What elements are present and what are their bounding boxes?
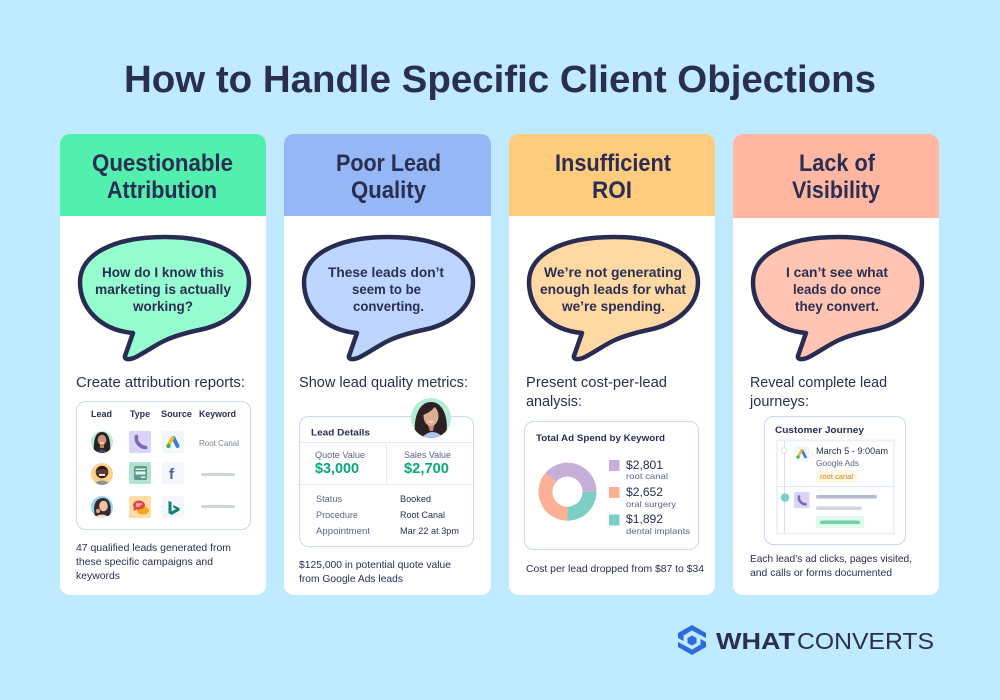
header: insufficient ROI: ROI: [592, 177, 632, 204]
icon: facebook source: f: [169, 466, 175, 483]
chart: total ad spend by keyword: Total Ad Spend by Keyword: [536, 433, 665, 444]
caption: potential quote value: from Google Ads leads: [299, 573, 403, 585]
icon: chat type: [129, 496, 151, 518]
title: How to Handle Specific Client Objections: [124, 59, 876, 101]
subheading: complete lead journeys: Reveal complete lead: [750, 375, 887, 391]
card: customer journey: [764, 416, 906, 544]
card: lead details: $2,700: [404, 460, 449, 477]
card: customer journey: Customer Journey: [775, 425, 865, 436]
legend: $2,801: [626, 458, 663, 472]
icon: facebook source: [162, 462, 184, 484]
header: questionable attribution: Attribution: [107, 177, 217, 204]
chart: total ad spend by keyword: [524, 422, 698, 550]
legend: $2,652: [626, 485, 663, 499]
speech bubble: lead quality objection: converting.: [353, 298, 424, 314]
card: lead details: Booked: [400, 494, 431, 504]
avatar: lead portrait: [411, 398, 451, 440]
card: lead details: Lead Details: [311, 428, 370, 438]
card: lead details: Sales Value: [404, 450, 451, 460]
avatar: woman with dark hair: [91, 431, 113, 454]
speech bubble: lead quality objection: [304, 237, 473, 359]
speech bubble: attribution objection: [80, 237, 249, 359]
subheading: complete lead journeys: [749, 375, 887, 410]
card: lead details: Appointment: [316, 526, 371, 536]
panel: poor lead quality: [284, 134, 491, 595]
table: attribution report: Source: [161, 409, 192, 419]
header: insufficient ROI: [509, 134, 715, 216]
header: lack of visibility: [733, 134, 939, 218]
donut chart: [538, 463, 596, 521]
speech bubble: visibility objection: [753, 237, 922, 359]
icon: google ads step: [794, 446, 810, 462]
tag: root canal: root canal: [820, 472, 853, 481]
speech bubble: visibility objection: they convert.: [795, 298, 879, 314]
legend: oral surgery: [626, 499, 677, 509]
logo: WhatConverts: WHAT: [716, 628, 796, 654]
avatar: man with beard: [91, 463, 113, 486]
table: attribution report: Root Canal: [199, 438, 239, 448]
speech bubble: ROI objection: [529, 237, 698, 359]
legend: dental implants: [626, 526, 690, 536]
caption: potential quote value: $125,000 in potential quote value: [299, 559, 451, 571]
subheading: cost-per-lead analysis: analysis:: [526, 394, 582, 410]
card: lead details: Procedure: [316, 510, 358, 520]
icon: phone call type: [129, 431, 151, 453]
icon: phone step: [794, 492, 810, 508]
header: poor lead quality: [284, 134, 491, 216]
icon: google ads source: [162, 431, 184, 453]
subheading: attribution reports: Create attribution reports:: [76, 375, 245, 391]
tag: root canal: [816, 470, 857, 482]
speech bubble: lead quality objection: seem to be: [352, 281, 421, 297]
panel: lack of visibility: [733, 134, 939, 595]
table: attribution report: Lead: [91, 409, 112, 419]
panel: questionable attribution: [60, 134, 266, 595]
caption: journey documentation: and calls or forms documented: [750, 567, 892, 579]
speech bubble: ROI objection: we’re spending.: [561, 298, 665, 314]
caption: journey documentation: [750, 553, 912, 579]
card: lead details: Root Canal: [400, 510, 445, 520]
speech bubble: attribution objection: How do I know this: [102, 264, 224, 280]
legend: root canal: [626, 471, 668, 481]
header: lack of visibility: Lack of: [799, 150, 876, 177]
caption: qualified leads: 47 qualified leads generated from: [76, 542, 231, 554]
card: customer journey: March 5 - 9:00am: [816, 446, 888, 456]
logo: WhatConverts: CONVERTS: [797, 628, 934, 654]
subheading: lead quality metrics: Show lead quality metrics:: [299, 375, 468, 391]
speech bubble: lead quality objection: These leads don’t: [328, 264, 444, 280]
table: attribution report: Keyword: [199, 409, 236, 419]
legend: [609, 458, 690, 536]
speech bubble: attribution objection: marketing is actually: [95, 281, 231, 297]
card: lead details: [300, 416, 474, 546]
speech bubble: ROI objection: enough leads for what: [540, 281, 686, 297]
caption: qualified leads: [76, 542, 231, 582]
card: lead details: $3,000: [315, 460, 359, 477]
caption: potential quote value: [299, 559, 451, 585]
header: lack of visibility: Visibility: [792, 177, 881, 204]
avatar: woman on phone: [91, 496, 113, 519]
speech bubble: attribution objection: working?: [132, 298, 193, 314]
speech bubble: ROI objection: We’re not generating: [544, 264, 682, 280]
speech bubble: visibility objection: I can’t see what: [786, 264, 888, 280]
icon: bing source: [162, 496, 184, 518]
table: attribution report: [76, 402, 250, 530]
icon: form type: [129, 462, 151, 484]
card: lead details: Mar 22 at 3pm: [400, 526, 459, 536]
header: poor lead quality: Poor Lead: [336, 150, 441, 177]
header: questionable attribution: [60, 134, 266, 216]
caption: qualified leads: keywords: [76, 570, 120, 582]
panel: insufficient ROI: [509, 134, 715, 595]
speech bubble: visibility objection: leads do once: [793, 281, 881, 297]
card: customer journey: Google Ads: [816, 458, 859, 468]
subheading: cost-per-lead analysis: Present cost-per-lead: [526, 375, 667, 391]
table: attribution report: Type: [130, 409, 150, 419]
legend: $1,892: [626, 512, 663, 526]
logo: WhatConverts: [678, 625, 934, 655]
icon: hexagon mark: [678, 625, 706, 655]
card: lead details: Status: [316, 494, 343, 504]
subheading: cost-per-lead analysis: [526, 375, 667, 410]
header: questionable attribution: Questionable: [92, 150, 233, 177]
header: insufficient ROI: Insufficient: [555, 150, 671, 177]
card: lead details: Quote Value: [315, 450, 365, 460]
header: poor lead quality: Quality: [351, 177, 427, 204]
caption: cost per lead: Cost per lead dropped from $87 to $34: [526, 563, 704, 575]
caption: journey documentation: Each lead’s ad clicks, pages visited,: [750, 553, 912, 565]
caption: qualified leads: these specific campaigns and: [76, 556, 213, 568]
subheading: complete lead journeys: journeys:: [749, 394, 809, 410]
